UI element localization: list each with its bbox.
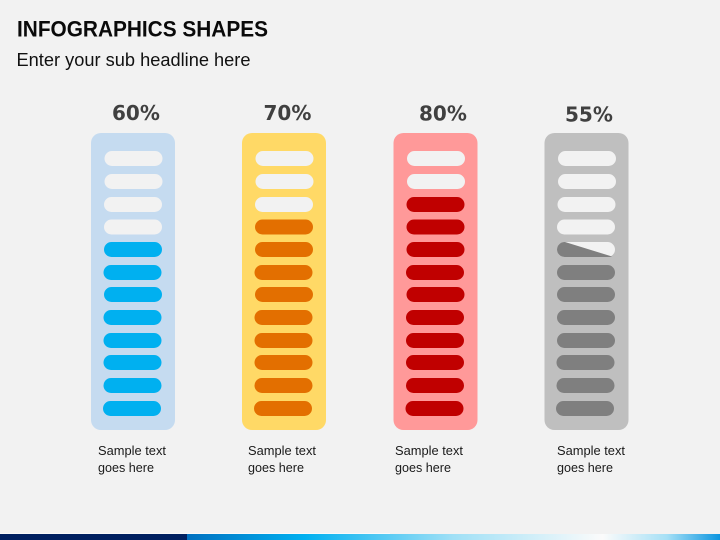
panel background grey bbox=[544, 133, 628, 430]
panel background red bbox=[394, 133, 478, 430]
empty pills bbox=[255, 151, 314, 212]
percentage label 70%: 70% bbox=[264, 101, 311, 125]
footer bar bbox=[0, 533, 720, 540]
partially filled pill bbox=[557, 242, 615, 257]
subtitle: Enter your sub headline here bbox=[16, 50, 250, 70]
percentage label 55%: 55% bbox=[565, 102, 613, 126]
column: 80% red: goes here bbox=[395, 460, 451, 475]
title: INFOGRAPHICS SHAPES bbox=[17, 16, 268, 42]
empty pills bbox=[407, 151, 465, 189]
caption: Sample text bbox=[557, 443, 625, 458]
filled pills bbox=[103, 242, 162, 416]
column: 70% yellow: goes here bbox=[248, 460, 304, 475]
column: 70% yellow bbox=[242, 101, 326, 475]
empty pills bbox=[557, 151, 616, 234]
filled pills bbox=[254, 220, 313, 416]
caption: Sample text bbox=[98, 443, 166, 458]
column: 60% blue: goes here bbox=[98, 460, 154, 475]
filled pills bbox=[556, 265, 615, 416]
filled pills bbox=[406, 197, 464, 416]
empty pills bbox=[104, 151, 162, 234]
caption: Sample text bbox=[395, 443, 463, 458]
column: 60% blue bbox=[91, 101, 175, 475]
percentage label 60%: 60% bbox=[112, 101, 160, 125]
column: 55% grey bbox=[544, 102, 628, 475]
panel background yellow bbox=[242, 133, 326, 430]
panel background blue bbox=[91, 133, 175, 430]
column: 80% red bbox=[394, 102, 478, 475]
caption: Sample text bbox=[248, 443, 316, 458]
column: 55% grey: goes here bbox=[557, 460, 613, 475]
percentage label 80%: 80% bbox=[419, 102, 467, 126]
